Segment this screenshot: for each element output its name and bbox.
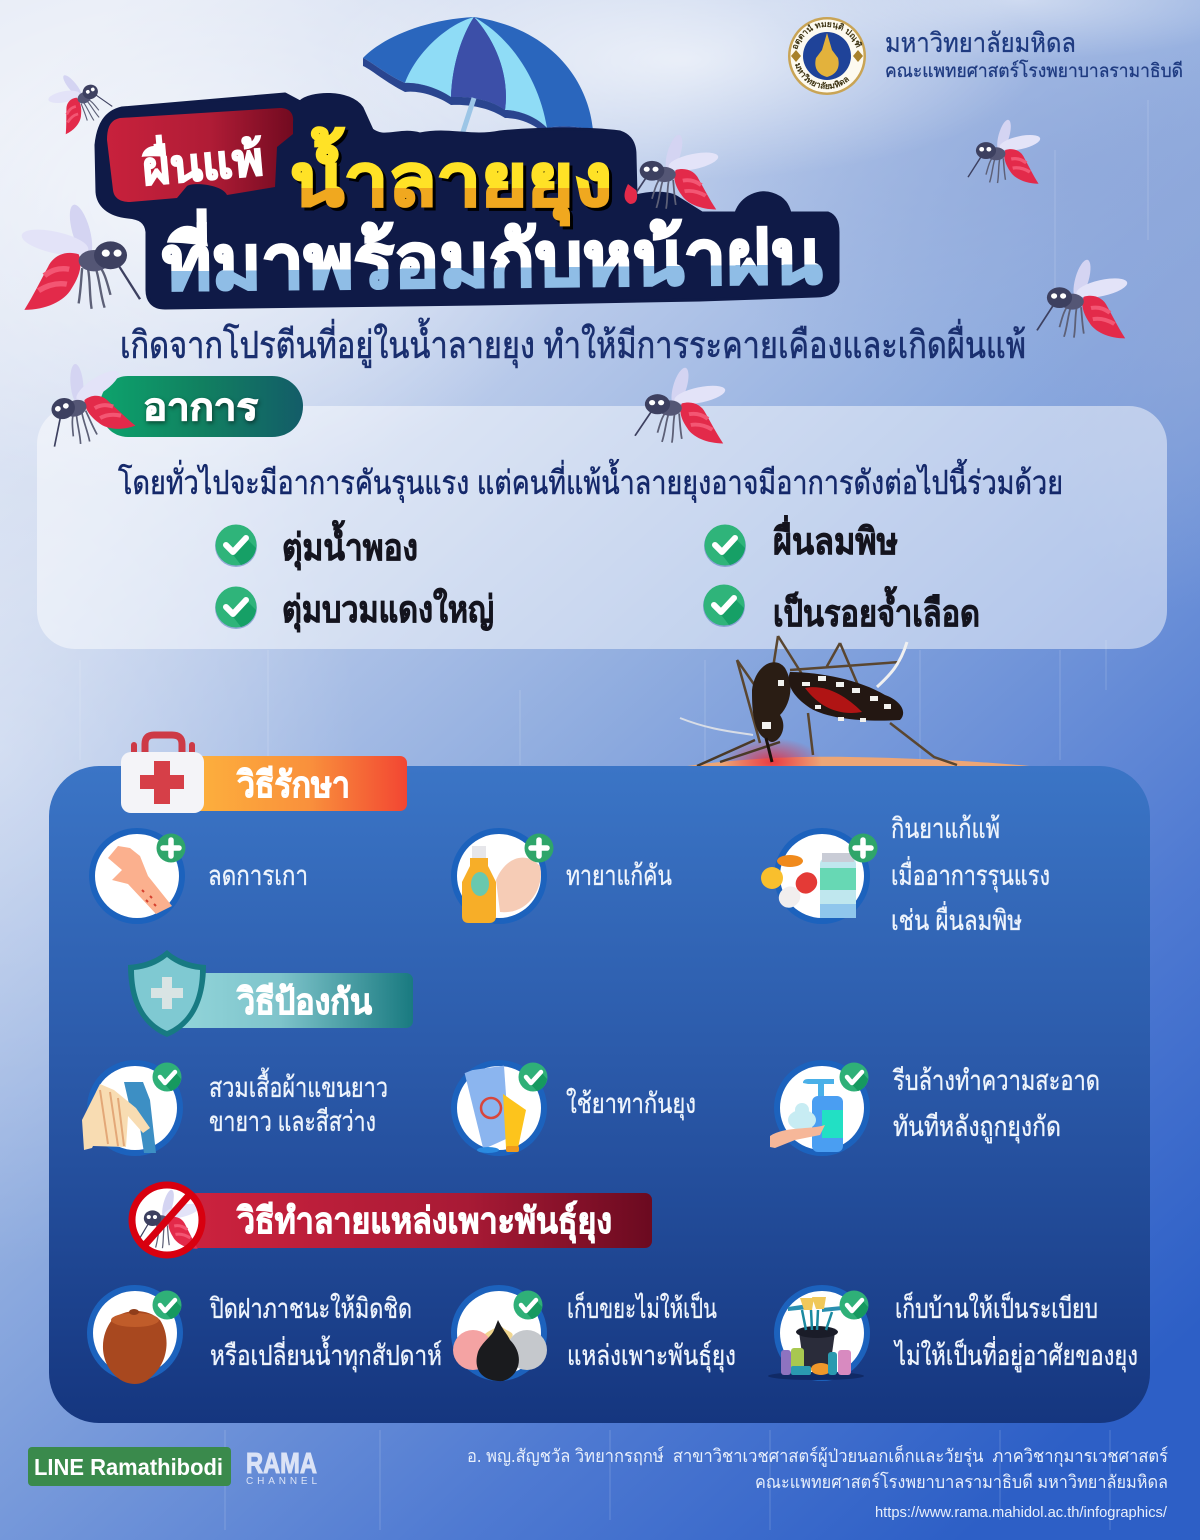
panel: treatment, prevention, destroying breeding sites (49, 735, 1150, 1423)
treatment: antihistamine (761, 813, 1050, 936)
prevention: long sleeves: ขายาว และสีสว่าง (209, 1106, 376, 1137)
credits: คณะแพทยศาสตร์โรงพยาบาลรามาธิบดี มหาวิทยาลัยมหิดล (755, 1471, 1168, 1492)
RAMA Channel logo (246, 1448, 317, 1487)
credits (467, 1444, 1168, 1521)
treatment: antihistamine: กินยาแก้แพ้ (891, 813, 1000, 844)
prevention: wash immediately (770, 1060, 1100, 1156)
university name (885, 28, 1183, 82)
icon: shield (128, 950, 206, 1037)
mosquito: centre (635, 366, 727, 443)
prevention: wash immediately: ทันทีหลังถูกยุงกัด (893, 1111, 1061, 1144)
prevention: wash immediately: รีบล้างทำความสะอาด (892, 1065, 1100, 1096)
destroy: cover containers: หรือเปลี่ยนน้ำทุกสัปดาห์ (210, 1335, 442, 1373)
umbrella (363, 17, 593, 138)
symptom: large red swelling (215, 586, 494, 633)
heading: prevention (128, 950, 413, 1037)
treatment: anti-itch lotion: ทายาแก้คัน (566, 860, 672, 891)
LINE badge: LINE Ramathibodi (34, 1454, 223, 1480)
treatment: antihistamine: เช่น ผื่นลมพิษ (891, 901, 1022, 936)
prevention: repellent: ใช้ยาทากันยุง (566, 1087, 696, 1121)
heading: treatment (121, 735, 407, 813)
badge: rash (107, 108, 293, 202)
symptom: bruising (703, 584, 980, 634)
title line 2: ที่มาพร้อมกับหน้าฝน (161, 203, 822, 306)
destroy: garbage (451, 1285, 736, 1381)
heading: destroy breeding sites: วิธีทำลายแหล่งเพาะพันธุ์ยุง (236, 1200, 612, 1244)
symptom: blisters: ตุ่มน้ำพอง (282, 520, 418, 571)
symptom: hives: ผื่นลมพิษ (773, 515, 898, 562)
icon: no mosquito (129, 1182, 205, 1258)
logo: Mahidol University seal (788, 17, 866, 95)
heading: symptoms (100, 376, 303, 437)
symptom: hives (704, 515, 898, 567)
prevention: long sleeves (82, 1060, 388, 1156)
panel: symptoms (37, 406, 1167, 649)
credits: https://www.rama.mahidol.ac.th/infographics/ (875, 1504, 1168, 1521)
mosquito: on symptoms heading (30, 349, 139, 454)
mosquito: top left (40, 62, 115, 135)
destroy: tidy house: เก็บบ้านให้เป็นระเบียบ (895, 1291, 1098, 1324)
heading: prevention: วิธีป้องกัน (236, 981, 372, 1022)
title backing (96, 94, 838, 308)
treatment: anti-itch lotion (451, 828, 672, 924)
university name: มหาวิทยาลัยมหิดล (885, 28, 1076, 58)
destroy: garbage: เก็บขยะไม่ให้เป็น (567, 1291, 717, 1324)
treatment: antihistamine: เมื่ออาการรุนแรง (891, 856, 1050, 893)
symptom: large red swelling: ตุ่มบวมแดงใหญ่ (282, 587, 494, 633)
destroy: cover containers (87, 1285, 442, 1384)
mosquito: on title (624, 133, 720, 209)
heading: treatment: วิธีรักษา (236, 764, 350, 805)
LINE badge (28, 1447, 231, 1486)
destroy: tidy house: ไม่ให้เป็นที่อยู่อาศัยของยุง (893, 1336, 1138, 1373)
university name: คณะแพทยศาสตร์โรงพยาบาลรามาธิบดี (885, 59, 1183, 82)
heading: destroy breeding sites (129, 1182, 652, 1258)
photo: biting mosquito on skin (680, 636, 1040, 786)
mosquito: large left (19, 203, 140, 310)
title (96, 94, 838, 308)
prevention: repellent (451, 1060, 696, 1156)
title line 1: น้ำลายยุง (290, 127, 612, 226)
heading: symptoms: อาการ (143, 387, 259, 429)
icon: first aid kit (121, 735, 204, 813)
treatment: reduce scratching (89, 828, 308, 924)
symptom: blisters (215, 520, 418, 571)
RAMA Channel logo: RAMA (246, 1448, 317, 1480)
prevention: long sleeves: สวมเสื้อผ้าแขนยาว (209, 1067, 388, 1103)
symptom: bruising: เป็นรอยจ้ำเลือด (773, 586, 980, 634)
logo: Mahidol University seal: มหาวิทยาลัยมหิดล (795, 63, 850, 90)
destroy: garbage: แหล่งเพาะพันธุ์ยุง (567, 1340, 736, 1373)
badge: rash: ผื่นแพ้ (140, 127, 265, 195)
destroy: tidy house (768, 1285, 1138, 1381)
destroy: cover containers: ปิดฝาภาชนะให้มิดชิด (209, 1292, 412, 1324)
mosquito: right (1037, 258, 1129, 338)
treatment: reduce scratching: ลดการเกา (208, 860, 308, 891)
RAMA Channel logo: CHANNEL (246, 1476, 317, 1487)
mosquito: top right (968, 119, 1042, 184)
